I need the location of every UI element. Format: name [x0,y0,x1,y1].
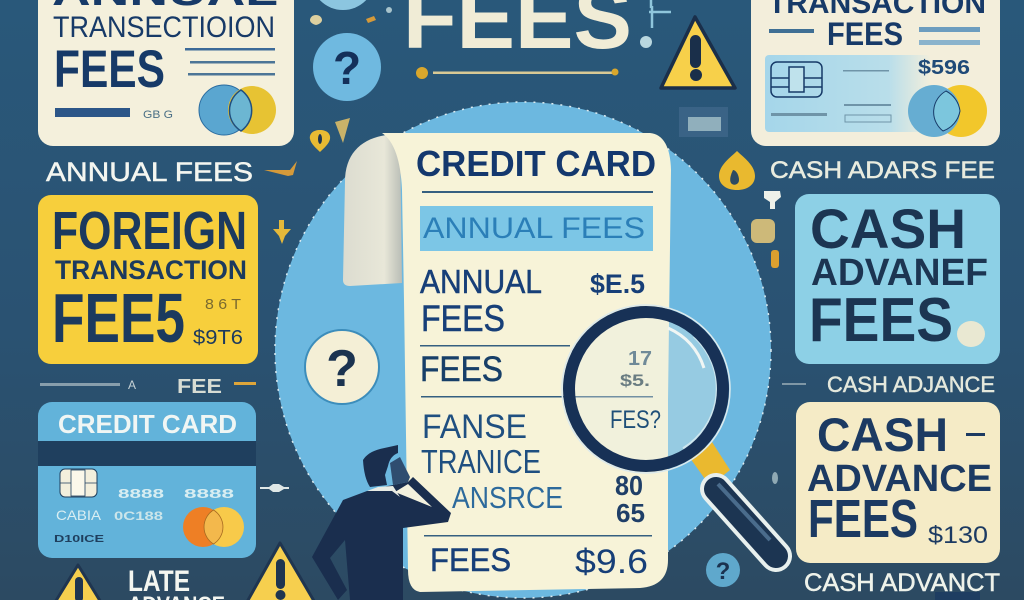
icon: light blue mark [649,0,671,28]
label: cash advance fee: CASH ADARS FEE [770,157,995,184]
panel: cash advance fees cream: CASH [817,408,948,461]
receipt paper [382,133,671,592]
label: late advance: LATE [128,565,190,598]
icon: question circle cream: ? [326,340,358,398]
receipt: $9.6 [575,543,648,581]
panel: annual transaction fees: GB G [143,109,173,121]
panel: foreign transaction fee: 8 6 T [205,296,241,313]
receipt: FANSE [422,408,527,446]
icon: overlapping circles [908,85,987,137]
receipt: 80 [615,470,643,501]
magnifying glass: FES? [610,406,661,434]
icon: card chip [771,62,822,97]
receipt: CREDIT CARD [416,143,656,184]
panel: credit card: 8888 [184,486,234,501]
panel: cash advance fees cream: $130 [928,522,988,549]
label: fee [40,376,256,398]
label: fee: A [128,378,136,392]
receipt: FEES [420,350,503,389]
receipt: TRANICE [421,443,541,480]
icon: card network circles [183,507,244,547]
magnifying glass: 17 [628,348,652,370]
icon: small document [679,107,728,137]
magnifier ring [569,312,723,466]
highlighted row: ANNUAL FEES [423,212,645,245]
panel: cash advance fees blue: CASH [810,197,966,260]
gap between arm and chest [395,484,432,507]
icon: small marks right [751,191,781,484]
panel: foreign transaction fee: $9T6 [193,327,243,349]
panel: credit card [38,402,256,558]
icon: small question circle: ? [716,558,730,585]
icon: small yellow marks [310,7,392,152]
person shirt collar [367,486,400,497]
magnifying glass: $5. [620,371,650,390]
magnifier handle [690,442,776,556]
person face [390,457,410,485]
receipt [343,133,671,592]
label: fee: FEE [177,376,222,398]
icon: card chip [60,469,97,497]
panel: cash advance fees blue: FEES [809,286,953,355]
icon: yellow plus [273,220,291,244]
label: annual fees: ANNUAL FEES [46,157,253,187]
icon: small white marker [260,484,289,492]
panel: cash advance fees cream: ADVANCE [807,458,992,500]
panel: annual transaction fees [38,0,294,146]
icon: coin [957,321,985,347]
icon: warning triangle top right [661,17,735,88]
person body and arms [312,477,451,600]
panel: transaction fees top right: $596 [918,57,970,79]
panel: foreign transaction fee: FEE5 [52,279,185,357]
panel: credit card: CREDIT CARD [58,409,237,439]
receipt: FEES [421,298,505,339]
receipt curl [343,134,402,286]
panel: cash advance fees blue [795,194,1000,364]
central blue circle [275,102,771,598]
icon: question circle [313,33,381,101]
receipt: ANSRCE [452,480,563,515]
icon: small arrow mark [264,161,297,176]
panel: cash advance fees cream: FEES [808,489,918,549]
title underline [416,67,618,79]
panel: cash advance fees blue: ADVANEF [811,252,988,294]
panel: credit card: CABIA [56,507,102,523]
icon: yellow drop [719,151,755,190]
receipt: $E.5 [590,269,645,299]
person looking at receipt [312,445,451,600]
panel: transaction fees top right: FEES [827,16,903,52]
person hair [363,445,398,487]
panel: annual transaction fees: FEES [54,40,165,99]
panel: foreign transaction fee [38,195,258,364]
icon: question circle: ? [333,42,361,94]
magnifying glass [562,305,776,556]
title dot [640,36,652,48]
icon: warning triangle bottom centre [238,543,324,600]
panel: foreign transaction fee: TRANSACTION [55,255,247,285]
panel: credit card: 8888 [118,486,164,501]
label: cash advance bottom: CASH ADVANCT [804,569,1000,597]
icon: warning triangle bottom left [41,565,115,600]
panel: foreign transaction fee: FOREIGN [52,201,247,261]
receipt: 65 [616,498,645,528]
magnifier lens [570,313,722,465]
icon: question circle top (cropped) [311,0,375,10]
panel: transaction fees top right [751,0,1000,146]
highlighted row [420,206,653,251]
panel: cash advance fees cream [796,402,1000,563]
receipt: FEES [430,542,511,578]
icon: question circle cream [305,330,379,404]
label: cash advance: CASH ADJANCE [827,372,995,397]
receipt: ANNUAL [420,263,542,300]
panel: annual transaction fees: TRANSECTIOION [53,11,275,44]
icon: small question circle [706,553,740,587]
icon: overlapping circles [199,85,276,135]
panel: credit card: 0C188 [114,509,163,523]
panel: credit card: D10ICE [54,534,104,545]
